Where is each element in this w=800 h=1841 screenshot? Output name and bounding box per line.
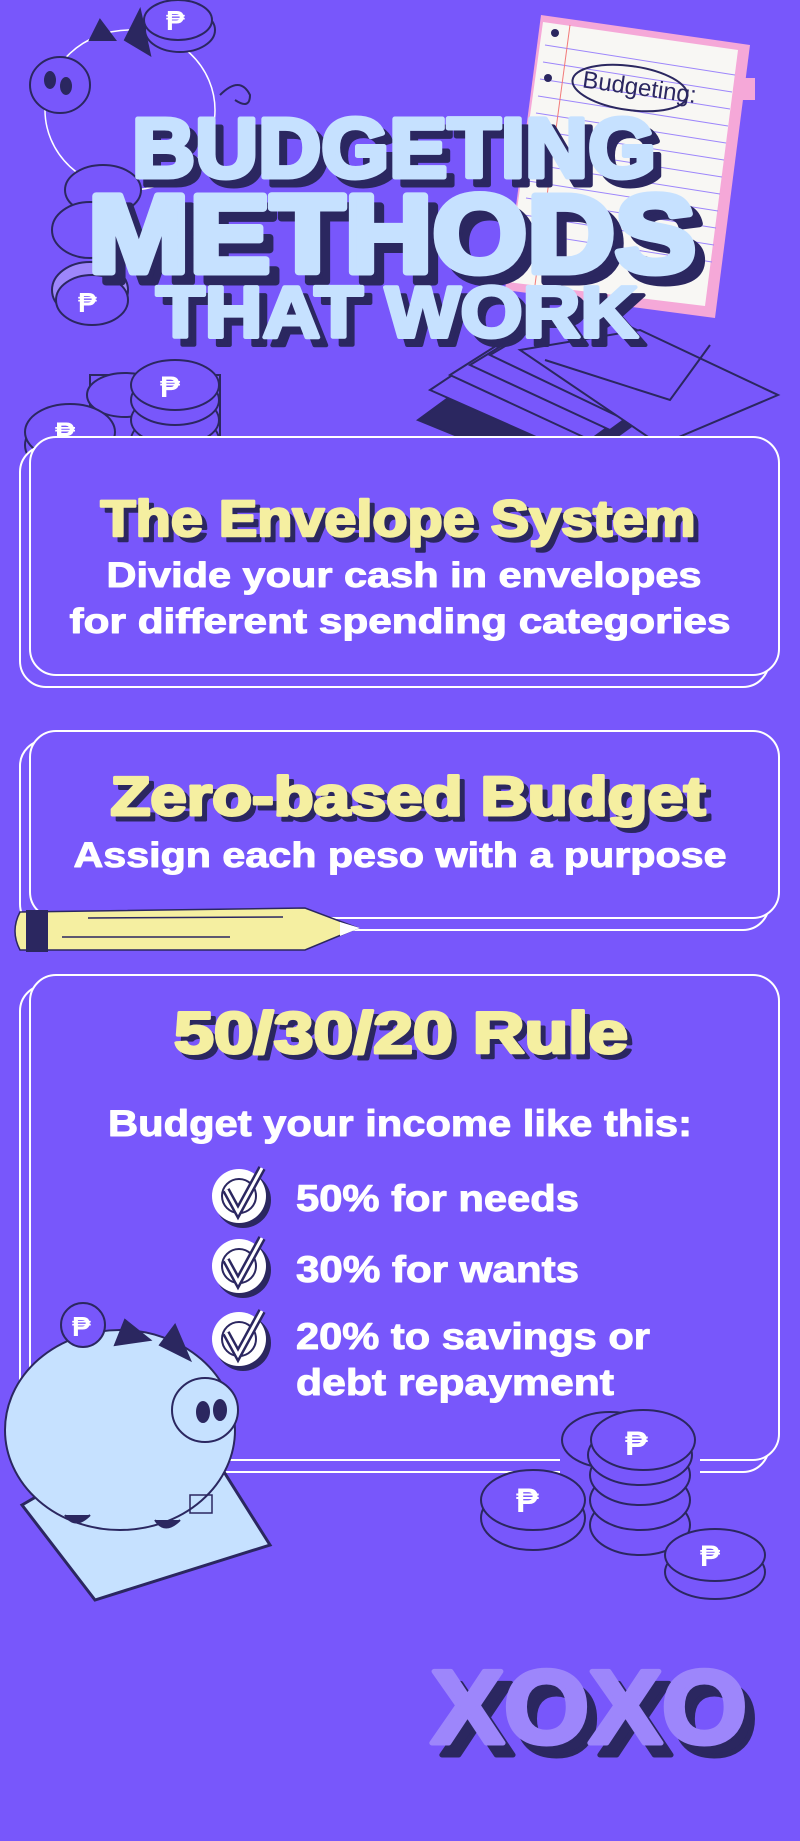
icon: coin stack left: ₱ bbox=[160, 371, 181, 404]
panel: zero-based budget bbox=[20, 731, 779, 930]
icon: notebook: Budgeting: bbox=[581, 66, 698, 109]
list: checks: 30% for wants bbox=[296, 1249, 579, 1290]
icon: notebook bbox=[505, 15, 755, 318]
panel: zero-based budget: Zero-based Budget bbox=[110, 765, 706, 827]
icon: piggy bank on card bbox=[5, 1303, 270, 1600]
heading: Zero-based Budget: Zero-based Budget bbox=[116, 770, 710, 832]
logo: XOXO: XOXO bbox=[441, 1662, 757, 1778]
icon: pencil bbox=[15, 908, 360, 952]
heading: The Envelope System: The Envelope System bbox=[106, 495, 700, 552]
text: description: Divide your cash in envelopes bbox=[106, 556, 702, 595]
list: checks: 50% for needs bbox=[296, 1178, 579, 1219]
title: METHODS bbox=[88, 173, 696, 296]
icon: coin top: ₱ bbox=[166, 5, 185, 36]
list: checks: 20% to savings or bbox=[296, 1316, 650, 1357]
text: intro: Budget your income like this: bbox=[108, 1103, 692, 1144]
list: checks: debt repayment bbox=[296, 1362, 614, 1403]
icon: piggy bank on card: ₱ bbox=[72, 1311, 91, 1342]
panel: 50/30/20 rule: 50/30/20 Rule bbox=[174, 1001, 628, 1066]
icon: coin stack left: ₱ bbox=[55, 417, 76, 450]
icon: falling coins left: ₱ bbox=[78, 287, 97, 318]
logo: XOXO: XOXO bbox=[431, 1650, 747, 1766]
icon: coin stack bottom-right: ₱ bbox=[625, 1425, 648, 1463]
panel: envelope system bbox=[20, 437, 779, 687]
panel: 50/30/20 rule bbox=[20, 975, 779, 1472]
title: BUDGETING bbox=[140, 109, 664, 203]
icon: coin stack bottom-right bbox=[481, 1410, 765, 1599]
title: THAT WORK bbox=[156, 273, 638, 353]
icon: coin stack bottom-right: ₱ bbox=[700, 1540, 721, 1573]
panel: envelope system: for different spending categories bbox=[70, 602, 730, 641]
icon: envelope stack bbox=[418, 302, 778, 478]
heading: 50/30/20 Rule: 50/30/20 Rule bbox=[179, 1006, 633, 1071]
list: checks bbox=[212, 1168, 650, 1403]
icon: falling coins left bbox=[52, 165, 141, 325]
icon: coin stack bottom-right: ₱ bbox=[516, 1482, 539, 1520]
panel: envelope system: The Envelope System bbox=[100, 490, 696, 547]
title: METHODS bbox=[98, 183, 706, 306]
text: description: Assign each peso with a purpose bbox=[74, 836, 726, 875]
title: BUDGETING bbox=[132, 101, 656, 195]
icon: coin top bbox=[144, 0, 215, 52]
title bbox=[88, 101, 706, 361]
title: THAT WORK bbox=[164, 281, 646, 361]
icon: piggy bank outline top-left bbox=[30, 10, 250, 190]
icon: coin stack left bbox=[25, 360, 220, 475]
